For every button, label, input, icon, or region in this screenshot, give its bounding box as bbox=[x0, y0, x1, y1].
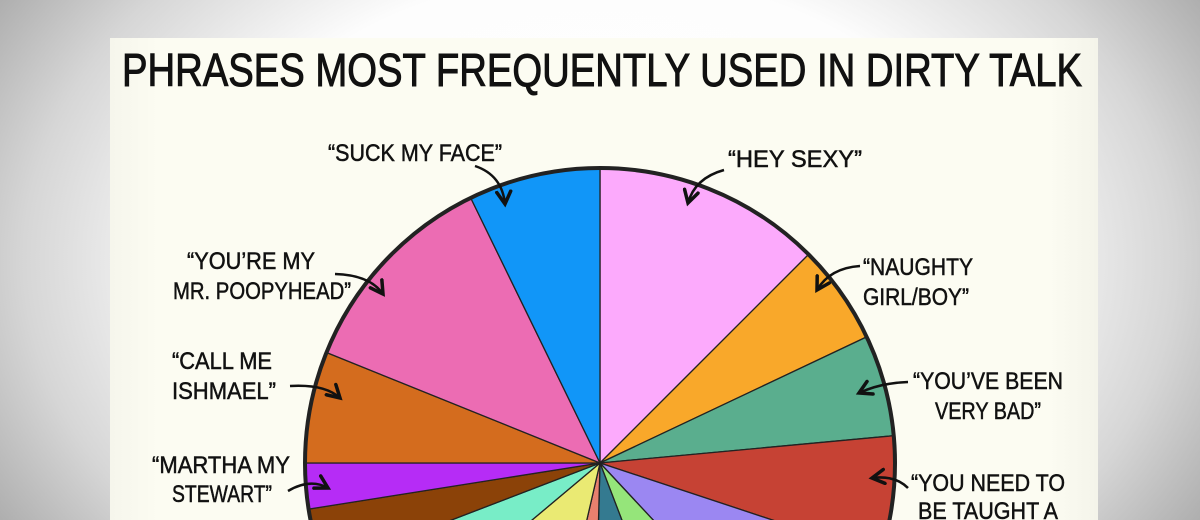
label: you need to be taught a: “YOU NEED TO bbox=[911, 470, 1065, 497]
label: martha my stewart bbox=[152, 456, 331, 502]
label: call me ishmael bbox=[172, 352, 342, 400]
panel: background card bbox=[110, 38, 1098, 520]
label: you've been very bad: VERY BAD” bbox=[935, 398, 1041, 425]
label: you need to be taught a bbox=[872, 470, 1065, 520]
label: you're my mr poopyhead: “YOU’RE MY bbox=[187, 248, 315, 275]
label: you've been very bad: “YOU’VE BEEN bbox=[913, 368, 1063, 395]
label: hey sexy: “HEY SEXY” bbox=[728, 146, 862, 173]
arrow: naughty bbox=[817, 266, 860, 290]
arrow: taught bbox=[872, 477, 908, 488]
label: naughty girl/boy: GIRL/BOY” bbox=[863, 284, 969, 311]
label: naughty girl/boy bbox=[815, 258, 973, 306]
arrow: ishmael bbox=[290, 386, 340, 398]
arrow: suck my face bbox=[475, 166, 505, 204]
arrow: hey sexy bbox=[688, 170, 724, 203]
label: martha my stewart: “MARTHA MY bbox=[152, 452, 290, 479]
label: you've been very bad bbox=[856, 372, 1062, 420]
label: suck my face: “SUCK MY FACE” bbox=[328, 140, 502, 167]
pie chart bbox=[305, 168, 895, 520]
label: suck my face bbox=[328, 140, 505, 204]
label: you're my mr poopyhead: MR. POOPYHEAD” bbox=[173, 278, 351, 305]
label: call me ishmael: ISHMAEL” bbox=[172, 378, 276, 405]
arrow: martha bbox=[288, 484, 328, 491]
arrow: very bad bbox=[859, 382, 908, 393]
label: call me ishmael: “CALL ME bbox=[172, 348, 272, 375]
label: martha my stewart: STEWART” bbox=[172, 481, 272, 508]
label: naughty girl/boy: “NAUGHTY bbox=[863, 254, 973, 281]
arrow: poopyhead bbox=[335, 274, 383, 294]
label: you're my mr poopyhead bbox=[174, 252, 385, 300]
label: hey sexy bbox=[688, 146, 862, 203]
